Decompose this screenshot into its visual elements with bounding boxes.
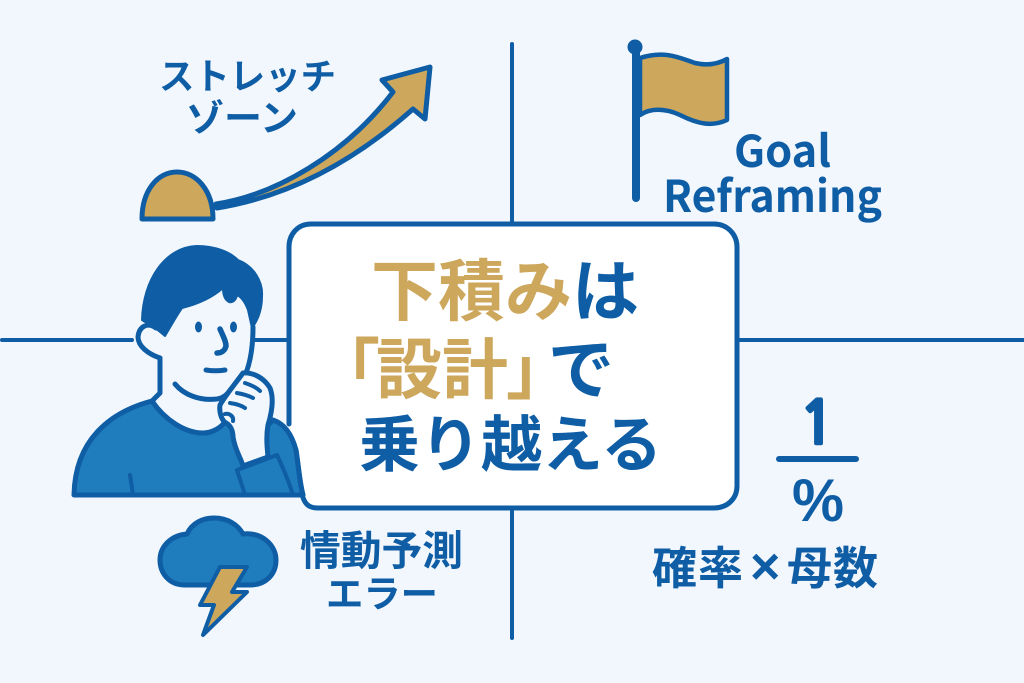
heading: affective forecasting error <box>300 528 463 615</box>
heading: affective forecasting error: 情動予測 <box>300 528 463 574</box>
heading: affective forecasting error: エラー <box>326 574 438 615</box>
panel: goal reframing <box>628 40 882 225</box>
title text: 「設計」 <box>314 333 572 407</box>
jaw <box>175 384 231 399</box>
heading: goal reframing: Reframing <box>663 161 882 225</box>
baseline <box>74 494 303 496</box>
icon: hill <box>142 172 213 219</box>
title text: で <box>548 333 614 407</box>
fraction icon: one over percent: % <box>792 467 844 534</box>
fingers <box>225 383 260 421</box>
fraction icon: one over percent <box>776 394 859 534</box>
heading: stretch zone: ストレッチ <box>159 56 336 97</box>
hand <box>220 373 272 466</box>
title text: 乗り越える <box>359 411 662 479</box>
hair <box>142 246 262 336</box>
heading: stretch zone <box>159 56 336 139</box>
title text: 下積みは <box>371 255 639 330</box>
title text <box>314 255 662 479</box>
body <box>74 401 303 495</box>
panel: central title card <box>289 224 737 508</box>
eyes <box>195 322 202 332</box>
heading: goal reframing: Goal <box>734 116 831 180</box>
nose <box>217 329 226 353</box>
caption: probability times population: 確率 <box>652 532 743 597</box>
heading: goal reframing <box>663 116 882 225</box>
mouth <box>206 368 225 373</box>
caption: probability times population: × <box>750 538 780 596</box>
panel: affective forecasting error <box>160 518 463 635</box>
face right edge <box>246 327 253 373</box>
neck and face <box>152 300 253 433</box>
panel: stretch zone <box>142 56 430 219</box>
heading: stretch zone: ゾーン <box>186 98 298 139</box>
cuff and sleeve lines <box>130 455 293 495</box>
icon: storm cloud <box>160 518 276 635</box>
ear <box>138 325 160 358</box>
shoulder right outline <box>296 450 303 495</box>
panel: probability times population <box>652 394 878 597</box>
arrow: rising curve <box>216 67 430 208</box>
icon: flag <box>628 40 727 198</box>
card border <box>289 224 737 508</box>
card background <box>289 224 737 508</box>
person: thinking man <box>74 246 303 495</box>
fraction icon: one over percent: 1 <box>799 394 835 453</box>
caption: probability times population: 母数 <box>787 532 878 597</box>
